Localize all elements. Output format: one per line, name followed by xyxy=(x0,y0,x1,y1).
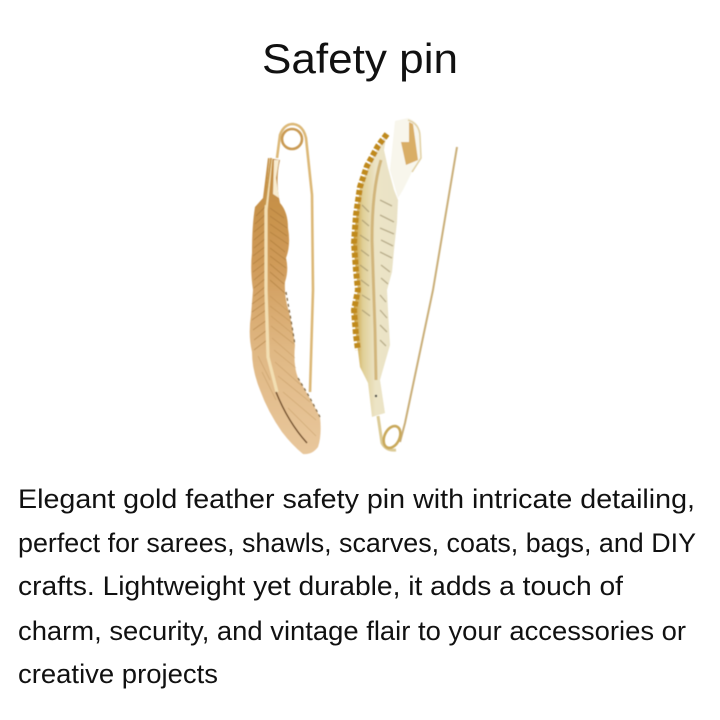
feather central stem xyxy=(266,158,277,392)
feather dark groove xyxy=(276,392,307,443)
photo: right gold feather pin, back view xyxy=(353,118,457,451)
description text: Elegant gold feather safety pin with intricate detailing, xyxy=(18,484,695,514)
photo: left gold feather pin, front view xyxy=(250,124,321,454)
description text: perfect for sarees, shawls, scarves, coats, bags, and DIY xyxy=(18,528,696,558)
feather barbs xyxy=(252,206,288,350)
pin wire and ring xyxy=(277,124,313,392)
needle and ring xyxy=(378,147,457,451)
feather body xyxy=(353,132,398,417)
feather body xyxy=(250,158,321,454)
feather rib xyxy=(372,160,381,380)
stem top edge xyxy=(265,158,271,205)
description text: charm, security, and vintage flair to your accessories or xyxy=(18,616,686,646)
feather dark edge xyxy=(286,292,320,417)
stem top highlight xyxy=(273,160,279,198)
feather texture xyxy=(360,200,394,346)
gold serrated edge xyxy=(354,134,387,350)
description text xyxy=(18,484,696,689)
description text: creative projects xyxy=(18,659,218,689)
clasp xyxy=(390,118,421,198)
title: Safety pin xyxy=(262,35,458,82)
description text: crafts. Lightweight yet durable, it adds a touch of xyxy=(18,571,624,601)
neck hole xyxy=(375,395,377,397)
